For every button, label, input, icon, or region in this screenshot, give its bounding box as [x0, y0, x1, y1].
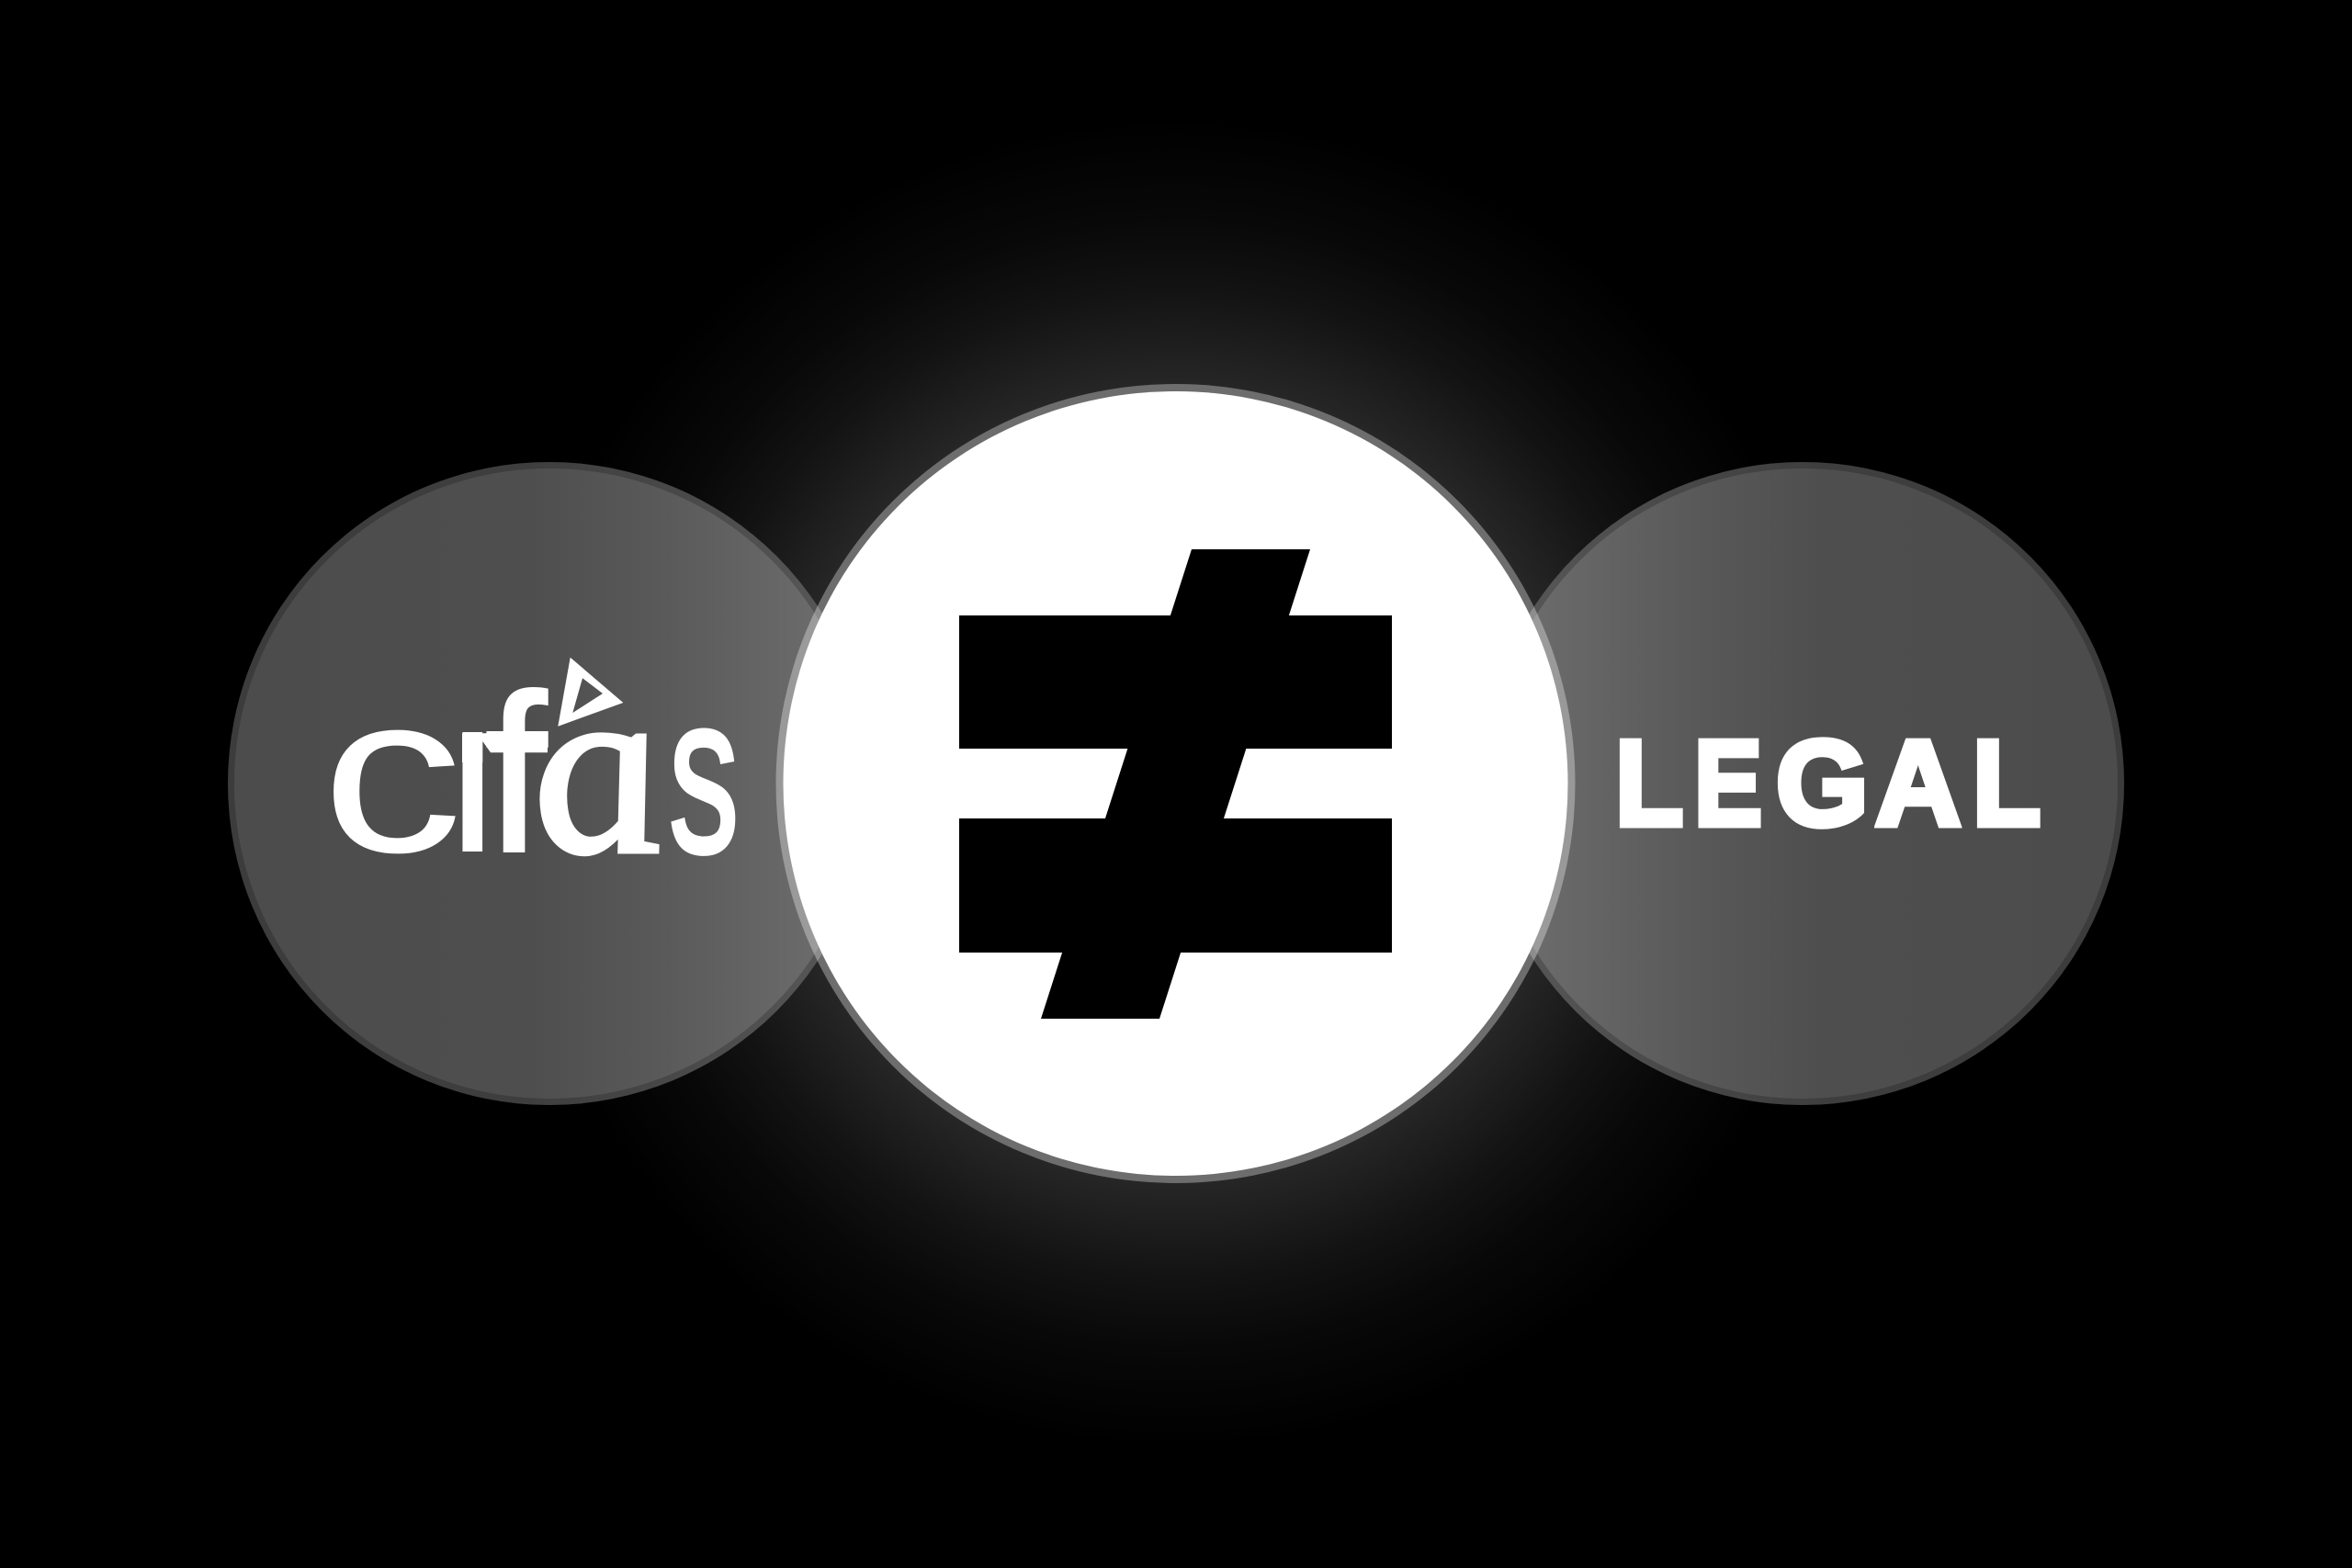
- right circle: [1481, 462, 2124, 1105]
- cifas logo wordmark: [322, 631, 739, 906]
- cifas logo wordmark: s: [669, 648, 739, 900]
- cifas logo wordmark: f: [484, 648, 547, 900]
- left circle: [228, 462, 871, 1105]
- legal label: G: [1776, 716, 1869, 851]
- legal label: [1615, 716, 2041, 851]
- icon: cifas logo triangle: [558, 658, 623, 727]
- legal label: E: [1694, 716, 1761, 851]
- cifas logo wordmark: i: [447, 648, 498, 900]
- cifas logo wordmark: a: [505, 631, 683, 906]
- cifas logo wordmark: c: [322, 648, 463, 900]
- cifas logo crossbar: [462, 733, 548, 762]
- icon: not-equal sign: [959, 549, 1392, 1019]
- legal label: L: [1973, 716, 2041, 851]
- legal label: A: [1875, 716, 1961, 851]
- centre circle: [775, 384, 1575, 1183]
- legal label: L: [1615, 716, 1683, 851]
